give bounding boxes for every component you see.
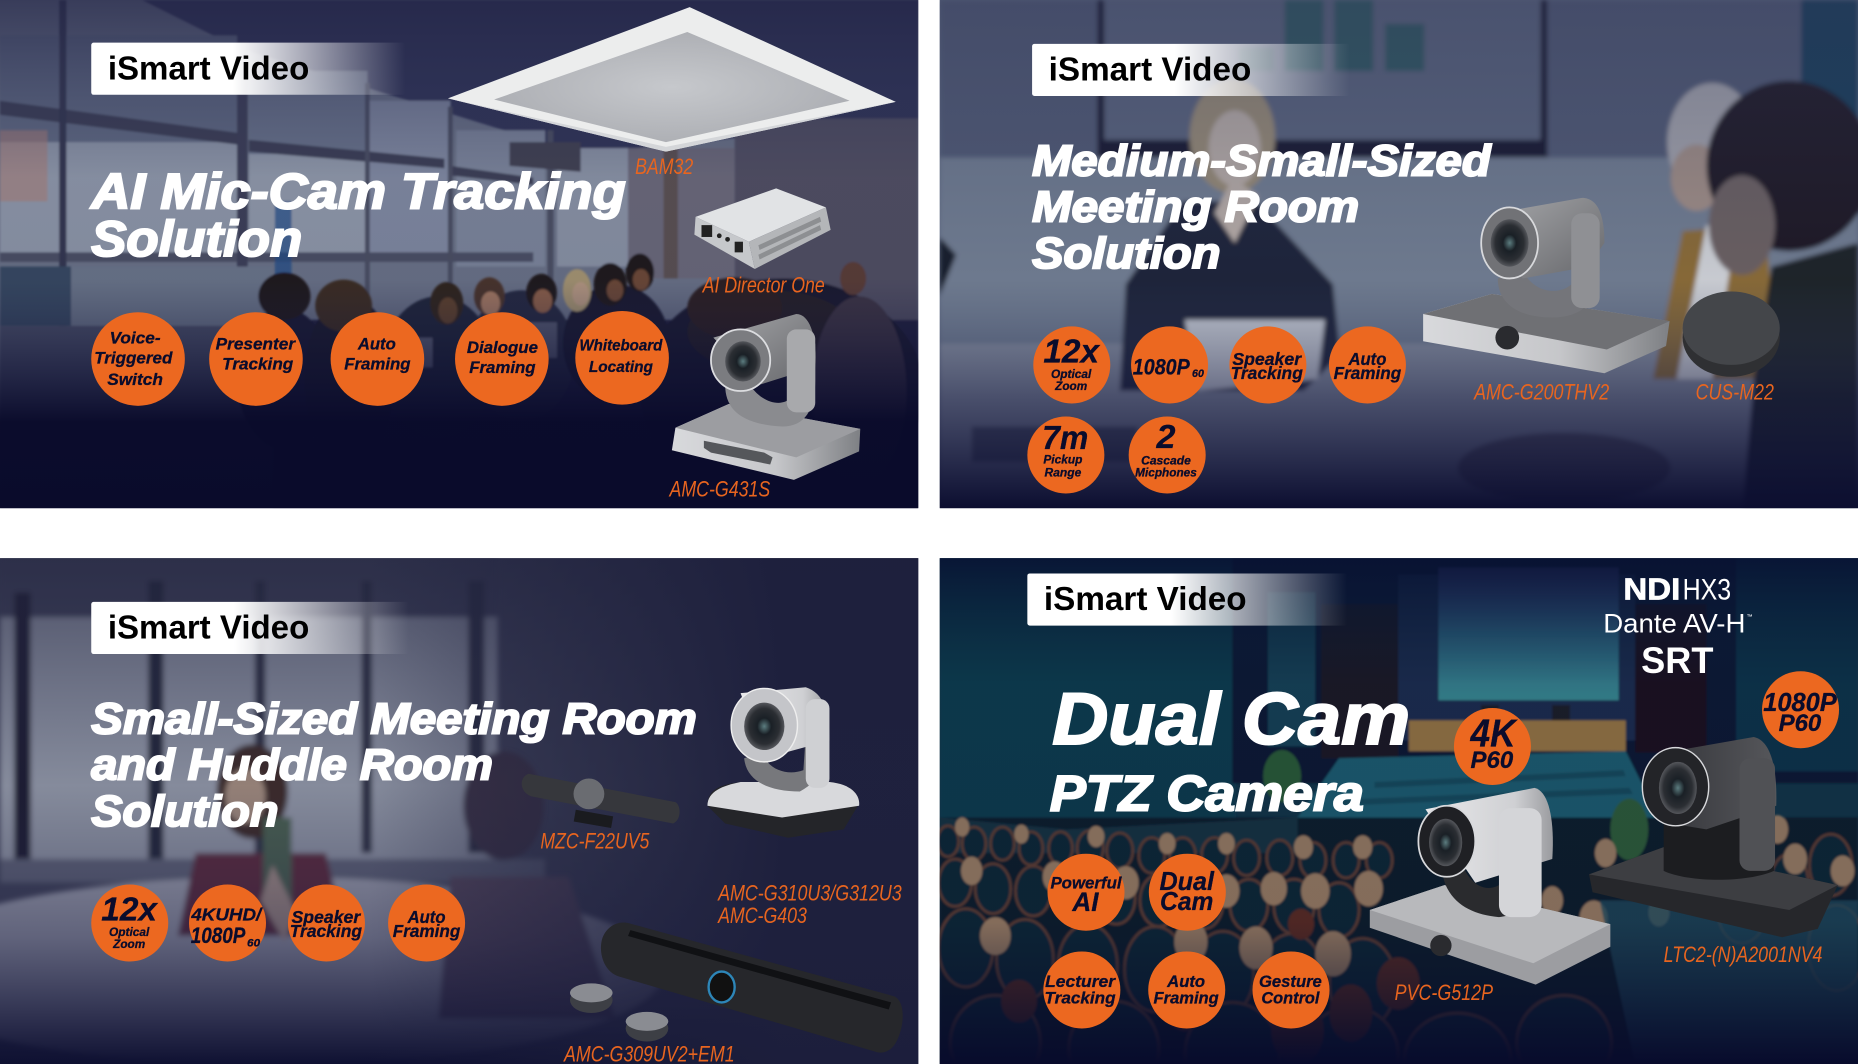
feature badge: Presenter Tracking	[209, 312, 303, 406]
product: AI Director One box	[694, 188, 831, 269]
feature badge: Speaker Tracking: Speaker	[1232, 349, 1302, 369]
feature badge: Auto Framing: Auto	[1166, 972, 1205, 991]
title: Meeting Room	[1032, 183, 1359, 232]
feature badge: Auto Framing: Auto	[1348, 349, 1387, 369]
feature badge: 1080P60: 1080P	[1133, 354, 1191, 379]
feature badge: Voice-Triggered Switch	[91, 312, 185, 406]
feature badge: Auto Framing: Auto	[357, 335, 396, 354]
feature badge: Auto Framing: Framing	[1154, 989, 1219, 1008]
feature badge: 4KUHD/1080P60	[189, 884, 266, 962]
feature badge: Dual Cam: Cam	[1160, 886, 1213, 916]
feature badge: Powerful AI: Powerful	[1050, 874, 1122, 893]
feature badge: 7m Pickup Range: Pickup	[1043, 452, 1082, 466]
background photo: huddle room	[0, 558, 918, 1064]
product: ceiling microphone BAM32	[448, 7, 896, 152]
title: Small-Sized Meeting Room	[91, 694, 697, 743]
title	[1032, 143, 1493, 270]
protocol logos: NDI HX3, Dante AV-H, SRT: Dante AV-H	[1603, 608, 1745, 639]
feature badge: 2 Cascade Micphones	[1129, 416, 1206, 493]
panel: AI Mic-Cam Tracking Solution	[0, 0, 924, 508]
product: camera AMC-G310U3	[707, 687, 859, 838]
logo bar	[91, 602, 409, 654]
label: PVC-G512P: PVC-G512P	[1395, 980, 1493, 1005]
panel: Dual Cam PTZ Camera	[937, 558, 1858, 1064]
feature badge: Whiteboard Locating: Whiteboard	[579, 338, 663, 355]
logo bar	[1027, 573, 1347, 626]
title: and Huddle Room	[91, 741, 493, 790]
feature badge: 1080P P60: P60	[1779, 711, 1821, 737]
protocol logos: NDI HX3, Dante AV-H, SRT: SRT	[1641, 640, 1714, 681]
title	[1050, 677, 1410, 821]
feature badge: Auto Framing	[1148, 951, 1225, 1028]
audience heads	[955, 815, 1854, 976]
label: AMC-G310U3/G312U3 and AMC-G403: AMC-G403	[716, 903, 807, 928]
feature badge: 4KUHD/1080P60: 4KUHD/	[190, 905, 263, 925]
logo bar	[91, 43, 405, 95]
product: camera AMC-G200THV2	[1423, 198, 1670, 373]
feature badge: Powerful AI: AI	[1071, 886, 1100, 917]
feature badge: Dialogue Framing: Dialogue	[467, 338, 538, 357]
product: soundbar AMC-G309UV2	[601, 923, 903, 1053]
feature badge: Lecturer Tracking	[1043, 951, 1120, 1028]
logo bar: iSmart Video	[108, 610, 309, 647]
protocol logos: NDI HX3, Dante AV-H, SRT: HX3	[1683, 574, 1731, 607]
woman with dark hair	[1706, 81, 1858, 251]
label: AMC-G200THV2: AMC-G200THV2	[1472, 379, 1610, 404]
feature badge: 7m Pickup Range: Range	[1045, 465, 1082, 479]
protocol logos: NDI HX3, Dante AV-H, SRT	[1603, 572, 1753, 681]
feature badge: Gesture Control	[1252, 951, 1330, 1028]
feature badge: 4KUHD/1080P60: 1080P	[191, 923, 246, 948]
feature badge: Presenter Tracking: Presenter	[216, 335, 297, 354]
feature badge: Powerful AI	[1047, 854, 1125, 931]
feature badge: Auto Framing: Framing	[344, 355, 411, 374]
feature badge: Dialogue Framing: Framing	[469, 358, 536, 377]
feature badge: 2 Cascade Micphones: Micphones	[1135, 465, 1197, 479]
feature badge: 1080P P60: 1080P	[1763, 687, 1837, 717]
feature badge: 4K P60	[1454, 708, 1531, 785]
feature badge: 12x Optical Zoom	[1033, 326, 1110, 403]
label: AMC-G431S: AMC-G431S	[668, 476, 770, 501]
feature badge: 12x Optical Zoom	[91, 884, 168, 962]
feature badge: 12x Optical Zoom: 12x	[1043, 334, 1101, 371]
feature badge: Auto Framing: Framing	[393, 921, 460, 941]
feature badge: Dual Cam: Dual	[1159, 866, 1215, 896]
product: camera PVC-G512P	[1370, 788, 1610, 985]
woman with yellow jacket	[1664, 80, 1744, 166]
second person	[463, 751, 544, 860]
feature badge: Auto Framing: Auto	[407, 907, 446, 927]
feature badge: 1080P P60	[1762, 671, 1839, 748]
seated woman in plaid	[178, 853, 346, 936]
feature badge: Auto Framing: Framing	[1334, 363, 1401, 383]
plants	[1263, 750, 1301, 802]
label: AMC-G310U3/G312U3 and AMC-G403	[716, 880, 902, 928]
feature badge: 12x Optical Zoom: Zoom	[1054, 379, 1088, 393]
feature badge: Speaker Tracking	[288, 884, 365, 962]
feature badge: Lecturer Tracking: Lecturer	[1045, 972, 1117, 991]
feature badge: Presenter Tracking: Tracking	[222, 355, 293, 374]
feature badge: 1080P60: 60	[1192, 368, 1204, 380]
product: speakerphone CUS-M22	[1683, 291, 1780, 377]
product: camera LTC2-(N)A2001NV4	[1589, 737, 1838, 937]
title: Solution	[91, 787, 278, 836]
title: AI Mic-Cam Tracking	[89, 164, 626, 220]
label: MZC-F22UV5: MZC-F22UV5	[540, 828, 650, 853]
feature badge: 12x Optical Zoom: Optical	[1051, 367, 1092, 381]
title: Dual Cam	[1052, 677, 1410, 760]
label: AMC-G310U3/G312U3 and AMC-G403: AMC-G310U3/G312U3	[716, 880, 902, 905]
feature badge: Dual Cam	[1149, 854, 1226, 931]
feature badge: Gesture Control: Control	[1261, 989, 1320, 1008]
woman in blazer	[1120, 201, 1340, 391]
feature badge: Voice-Triggered Switch: Voice-	[110, 329, 161, 348]
logo bar: iSmart Video	[108, 50, 309, 87]
feature badge: 12x Optical Zoom: 12x	[101, 892, 159, 929]
feature badge: 4K P60: 4K	[1470, 712, 1518, 755]
feature badge: Speaker Tracking	[1229, 326, 1306, 403]
protocol logos: NDI HX3, Dante AV-H, SRT: ™	[1747, 613, 1753, 620]
audience of people	[266, 312, 313, 330]
product: webcam bar MZC-F22UV5	[522, 774, 680, 828]
feature badge: 12x Optical Zoom: Zoom	[112, 937, 146, 951]
title: Medium-Small-Sized	[1032, 136, 1492, 185]
logo bar	[1032, 44, 1350, 96]
feature badge: Whiteboard Locating: Locating	[589, 359, 653, 376]
feature badge: 2 Cascade Micphones: 2	[1155, 419, 1176, 456]
title: PTZ Camera	[1050, 765, 1364, 821]
feature badge: 1080P60	[1131, 326, 1208, 403]
title	[88, 171, 626, 258]
logo bar: iSmart Video	[1049, 52, 1251, 89]
feature badge: Auto Framing	[388, 884, 465, 962]
logo bar: iSmart Video	[1044, 581, 1247, 618]
product: expansion microphones	[570, 983, 668, 1041]
feature badge: Voice-Triggered Switch: Switch	[107, 370, 163, 389]
background photo: meeting room	[940, 0, 1858, 508]
feature badge: Lecturer Tracking: Tracking	[1045, 989, 1116, 1008]
feature badge: 2 Cascade Micphones: Cascade	[1141, 453, 1191, 467]
panel: Small-Sized Meeting Room and Huddle Room Solution	[0, 558, 918, 1064]
feature badge: Speaker Tracking: Tracking	[290, 921, 362, 941]
label: AI Director One: AI Director One	[701, 273, 825, 298]
label: BAM32: BAM32	[635, 154, 694, 179]
title: Solution	[91, 211, 302, 267]
feature badge: Whiteboard Locating	[575, 311, 669, 405]
product: camera AMC-G431S	[672, 314, 860, 480]
feature badge: Gesture Control: Gesture	[1259, 972, 1322, 991]
feature badge: Auto Framing	[1329, 326, 1406, 403]
protocol logos: NDI HX3, Dante AV-H, SRT: NDI	[1623, 572, 1680, 607]
feature badge: 7m Pickup Range: 7m	[1042, 420, 1088, 457]
title: Solution	[1032, 229, 1220, 278]
background photo: boardroom with windows	[0, 0, 924, 508]
panel: Medium-Small-Sized Meeting Room Solution	[940, 0, 1858, 508]
feature badge: Speaker Tracking: Tracking	[1231, 363, 1303, 383]
title	[90, 701, 696, 828]
audience seats	[937, 826, 1858, 1064]
background photo: auditorium	[937, 558, 1858, 1064]
feature badge: 4KUHD/1080P60: 60	[247, 938, 260, 950]
feature badge: 4K P60: P60	[1471, 748, 1513, 774]
feature badge: Speaker Tracking: Speaker	[291, 907, 361, 927]
feature badge: Voice-Triggered Switch: Triggered	[94, 349, 173, 368]
feature badge: Dialogue Framing	[455, 312, 549, 406]
feature badge: 7m Pickup Range	[1027, 416, 1104, 493]
feature badge: Auto Framing	[331, 312, 424, 406]
label: CUS-M22: CUS-M22	[1696, 379, 1774, 404]
feature badge: 12x Optical Zoom: Optical	[109, 925, 150, 939]
